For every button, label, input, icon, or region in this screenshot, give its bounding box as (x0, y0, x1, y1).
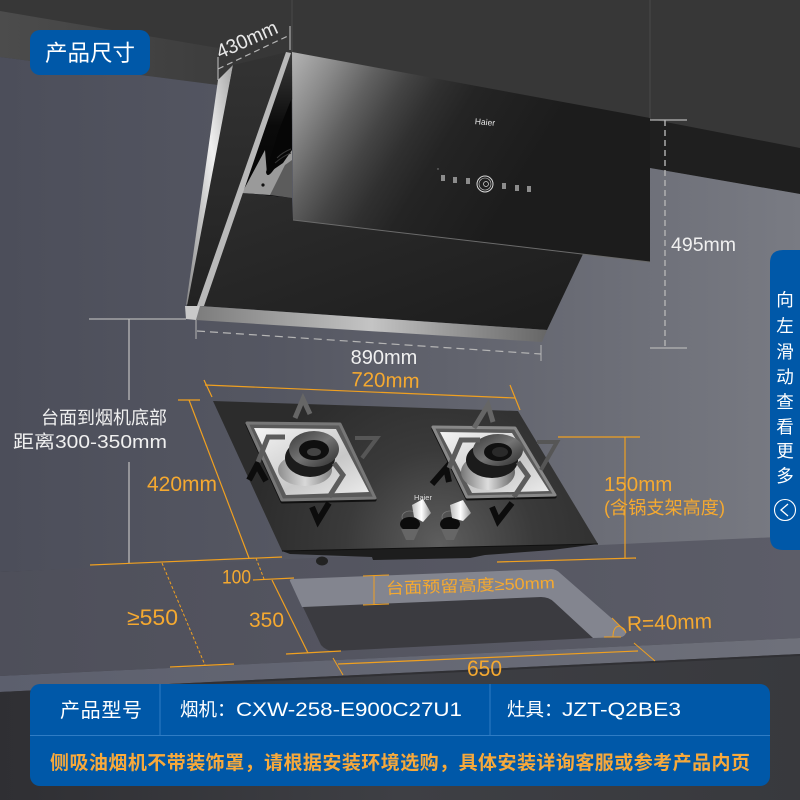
Haier logo on cooktop: Haier (414, 493, 432, 502)
dimension: 350 cut-out depth: 350 (249, 608, 284, 632)
dimension: 420mm cooktop depth: 420mm (147, 473, 217, 496)
Haier logo on hood: Haier (474, 116, 496, 128)
dimension: minimum 550: ≥550 (127, 605, 178, 630)
dimension: 720mm cooktop width (204, 368, 520, 410)
right knob (440, 500, 471, 540)
dimension: counter to hood distance (13, 319, 186, 563)
range hood (185, 52, 650, 342)
hood steel corner (185, 306, 200, 320)
left knob (400, 499, 431, 540)
hood lower steel strip (196, 306, 547, 342)
side tab: swipe left hint: 动 (776, 367, 794, 387)
dimension: 150mm height with pot support: (含锅支架高度) (604, 498, 725, 518)
icon: left chevron in circle (774, 500, 796, 520)
side tab: swipe left hint: 滑 (776, 342, 794, 362)
dimension: counter to hood distance: 台面到烟机底部 (41, 408, 167, 428)
installation note: 侧吸油烟机不带装饰罩，请根据安装环境选购，具体安装详询客服或参考产品内页 (50, 751, 750, 774)
glass top (213, 401, 598, 551)
side tab: swipe left hint (770, 250, 800, 550)
dimension: 420mm cooktop depth (90, 400, 282, 565)
dimension: 430mm depth: 430mm (213, 17, 281, 64)
cooktop underside (282, 544, 598, 566)
dimension: 650 cut-out width (333, 643, 655, 681)
title badge (30, 30, 150, 75)
right burner (432, 405, 557, 521)
side glass panel (187, 52, 287, 306)
control dial (477, 176, 493, 192)
countertop cut-out opening (290, 569, 626, 651)
hood model number: CXW-258-E900C27U1 (236, 699, 462, 721)
dimension: 100 (222, 558, 264, 588)
countertop (0, 536, 800, 694)
dimension: counter to hood distance: 距离300-350mm (13, 432, 167, 452)
dimension: 890mm width (196, 320, 541, 369)
model label: 产品型号 (60, 699, 142, 722)
product model panel (30, 684, 770, 786)
dimension: minimum 550 (127, 563, 234, 667)
dimension: 150mm height with pot support (497, 437, 725, 562)
dimension: 430mm depth (213, 17, 290, 80)
side tab: swipe left hint: 多 (776, 466, 794, 486)
side tab: swipe left hint: 向 (776, 290, 794, 310)
dimension: 150mm height with pot support: 150mm (604, 473, 672, 496)
hood front glass panel (292, 52, 650, 262)
hood model: 烟机： (180, 699, 236, 720)
dimension: reserved height 50mm: 台面预留高度≥50mm (386, 574, 555, 598)
title badge: 产品尺寸 (45, 41, 135, 66)
dimension: 720mm cooktop width: 720mm (351, 368, 420, 393)
side tab: swipe left hint: 更 (776, 441, 794, 461)
gas cooktop (213, 399, 598, 566)
hood body (200, 193, 583, 330)
dimension: 495mm height: 495mm (671, 234, 736, 256)
left silver trim (186, 65, 233, 305)
left burner (247, 399, 377, 521)
dimension: 350 cut-out depth (249, 578, 341, 654)
side tab: swipe left hint: 左 (776, 316, 794, 336)
cooktop model: 灶具： (507, 699, 563, 720)
dimension: R=40mm corner radius: R=40mm (627, 610, 712, 636)
hood inner cavity and bracket (242, 54, 292, 198)
side tab: swipe left hint: 看 (776, 417, 794, 437)
cooktop model number: JZT-Q2BE3 (562, 699, 681, 721)
dimension: 100: 100 (222, 568, 251, 588)
dimension: 650 cut-out width: 650 (467, 656, 502, 681)
touch controls (437, 168, 531, 192)
centre silver trim (197, 52, 291, 306)
side tab: swipe left hint: 查 (776, 392, 794, 412)
dimension: 890mm width: 890mm (351, 347, 417, 369)
